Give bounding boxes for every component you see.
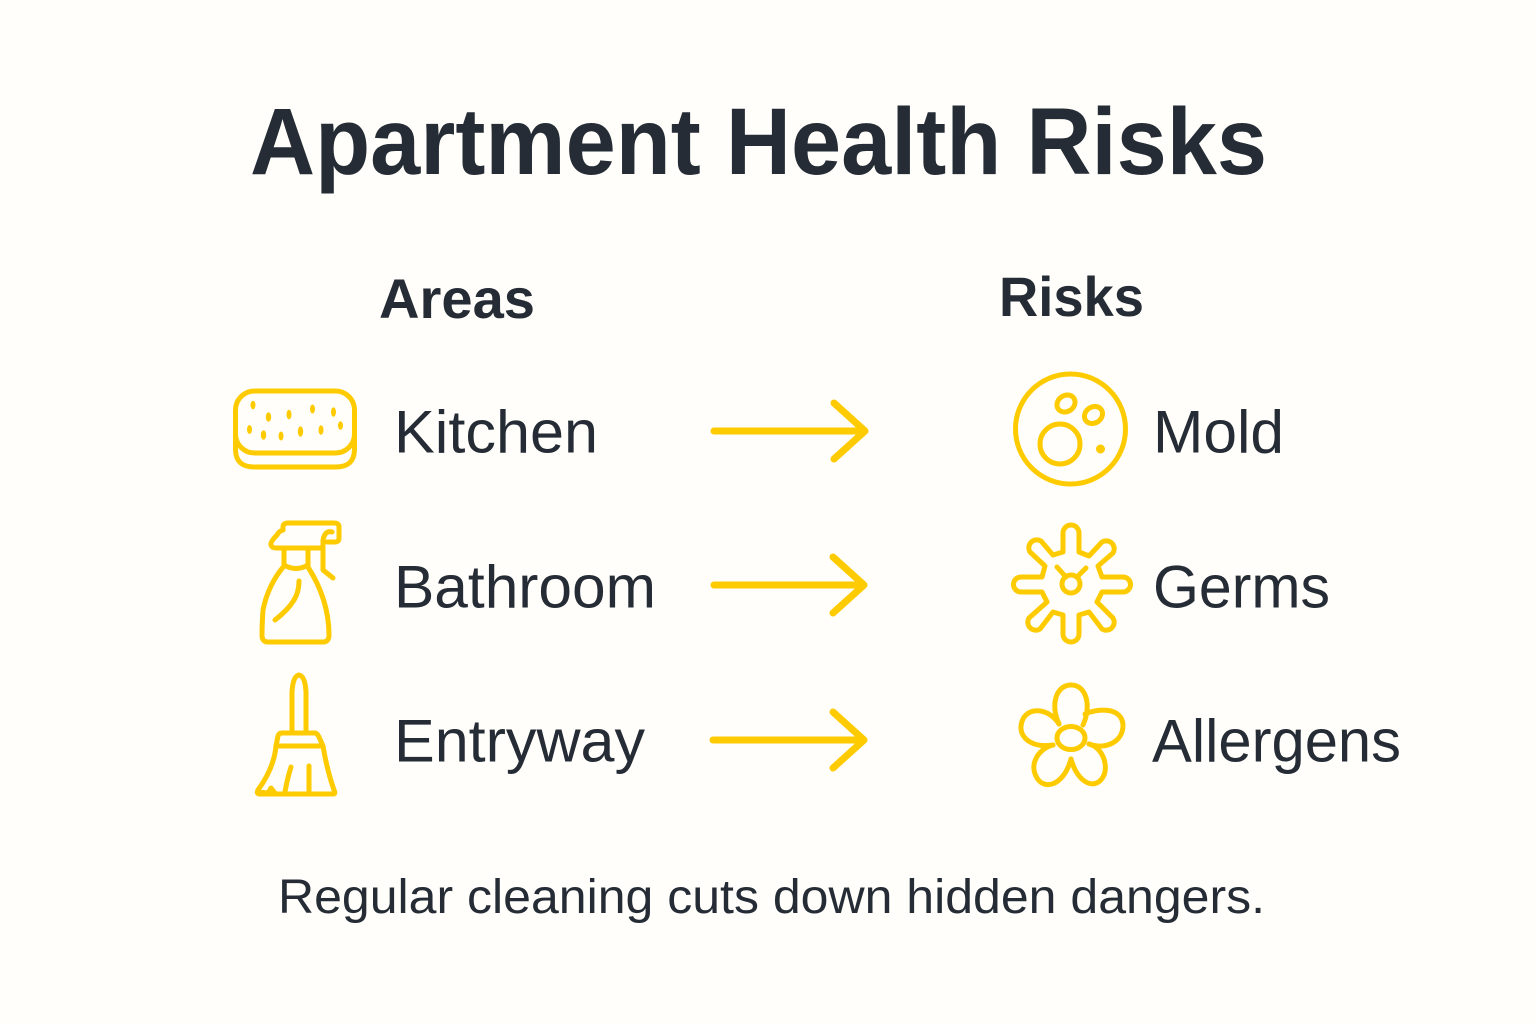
heading: areas: Areas: [379, 267, 535, 330]
icon: spray bottle: [262, 523, 339, 642]
arrow: kitchen to mold: [714, 403, 865, 459]
title: Apartment Health Risks: [250, 89, 1267, 195]
label: allergens: Allergens: [1152, 708, 1401, 774]
arrow: entryway to allergens: [713, 712, 864, 768]
arrow: bathroom to germs: [714, 557, 864, 613]
label: mold: Mold: [1153, 398, 1284, 466]
heading: risks: Risks: [999, 265, 1144, 328]
caption: Regular cleaning cuts down hidden dangers.: [278, 871, 1265, 924]
icon: broom: [257, 675, 335, 794]
icon: sponge: [236, 391, 354, 467]
icon: flower: [1021, 685, 1123, 785]
icon: mold: [1016, 374, 1126, 484]
label: germs: Germs: [1153, 554, 1330, 620]
label: entryway: Entryway: [394, 708, 645, 774]
icon: germs: [1014, 525, 1130, 642]
label: bathroom: Bathroom: [394, 554, 656, 620]
label: kitchen: Kitchen: [394, 398, 598, 466]
